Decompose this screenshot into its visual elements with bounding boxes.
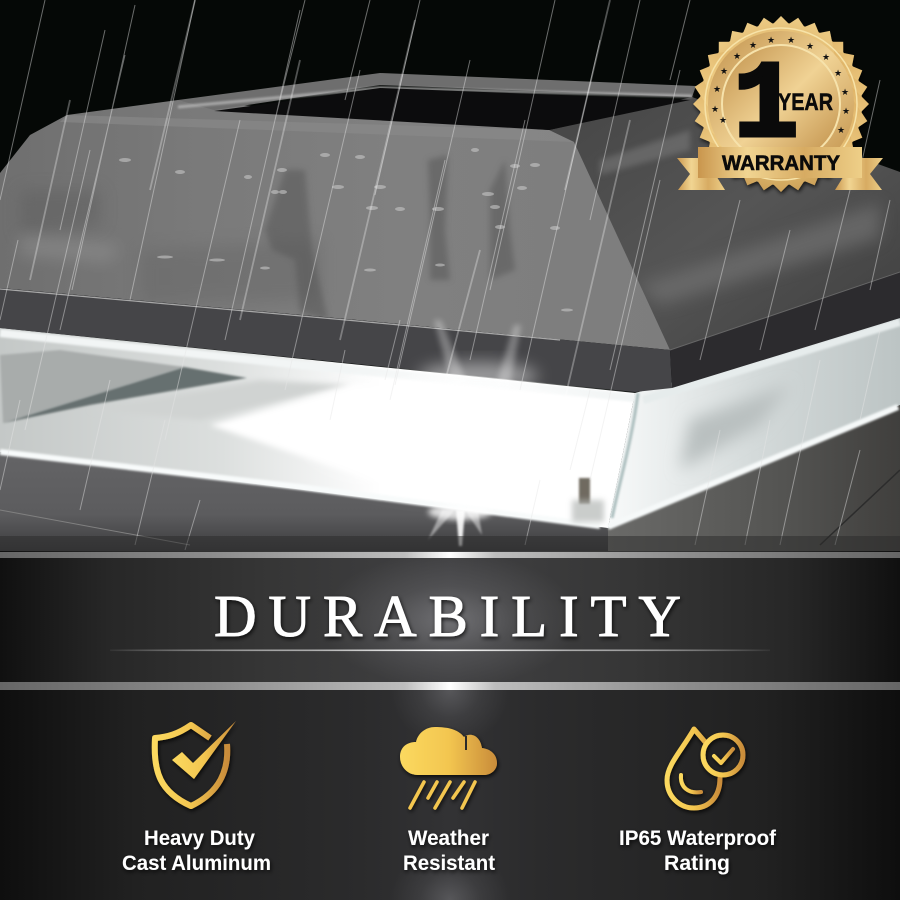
label: heavy duty cast aluminum: Cast Aluminum (122, 852, 271, 875)
badge: WARRANTY: WARRANTY (722, 152, 840, 175)
rain streaks (0, 0, 890, 550)
badge: inner rings (705, 28, 857, 180)
cap: screw (572, 478, 604, 522)
badge: stars: ★ (719, 116, 727, 126)
badge: stars: ★ (720, 67, 728, 77)
features panel (0, 690, 900, 900)
badge: stars: ★ (841, 88, 849, 98)
icon: shield with check (155, 721, 236, 806)
silver rule bottom (0, 682, 900, 690)
badge: stars: ★ (842, 107, 850, 117)
cap: solar panel (214, 88, 690, 130)
label: heavy duty cast aluminum (122, 827, 271, 875)
cap: right highlight (600, 130, 690, 175)
cap: right sloped face (549, 97, 900, 350)
badge: stars: ★ (787, 36, 795, 46)
badge: stars: ★ (713, 85, 721, 95)
light flare bottom (428, 504, 492, 546)
badge: ribbon tails (677, 158, 883, 190)
bottom fade of photo (0, 536, 900, 551)
cap: ridge and lid (178, 73, 696, 110)
title underline (110, 650, 770, 651)
cap: front skirt (0, 288, 672, 392)
badge: YEAR: YEAR (778, 89, 833, 116)
photo: solar post cap in the rain (0, 0, 900, 551)
cap: glass lens (0, 318, 900, 528)
title: DURABILITY: DURABILITY (214, 583, 681, 649)
badge: stars: ★ (767, 36, 775, 46)
badge: ribbon (698, 147, 862, 178)
badge: stars: ★ (822, 53, 830, 63)
feature: heavy duty cast aluminum (122, 721, 271, 875)
label: IP65 waterproof rating: IP65 Waterproof (619, 827, 777, 850)
title band (0, 551, 900, 690)
badge: stars: ★ (834, 69, 842, 79)
badge: seal teeth (693, 16, 869, 192)
badge: stars: ★ (837, 126, 845, 136)
cap: skirt highlight (0, 289, 560, 340)
badge: stars: ★ (749, 41, 757, 51)
label: weather resistant (403, 827, 495, 875)
icon: rain cloud (400, 727, 497, 808)
badge: 1 year warranty (677, 16, 883, 192)
label: heavy duty cast aluminum: Heavy Duty (144, 827, 255, 850)
light flare top (418, 320, 538, 390)
badge: stars: ★ (733, 52, 741, 62)
cap: lower housing (0, 405, 900, 551)
label: IP65 waterproof rating: Rating (664, 852, 730, 875)
badge: stars: ★ (711, 105, 719, 115)
cap: right skirt (670, 272, 900, 388)
badge: numeral 1: 1 (734, 46, 798, 168)
label: weather resistant: Weather (408, 827, 489, 850)
icon: water drop with check (667, 729, 743, 808)
badge: stars: ★ (806, 42, 814, 52)
feature: weather resistant (400, 727, 497, 875)
silver rule top (0, 552, 900, 558)
cap: water streaks (265, 155, 515, 320)
cap: water droplets (119, 148, 573, 312)
label: weather resistant: Resistant (403, 852, 495, 875)
feature: IP65 waterproof rating (619, 729, 777, 875)
label: IP65 waterproof rating (619, 827, 777, 875)
badge: stars (711, 36, 850, 136)
cap: front sloped face (0, 100, 670, 350)
